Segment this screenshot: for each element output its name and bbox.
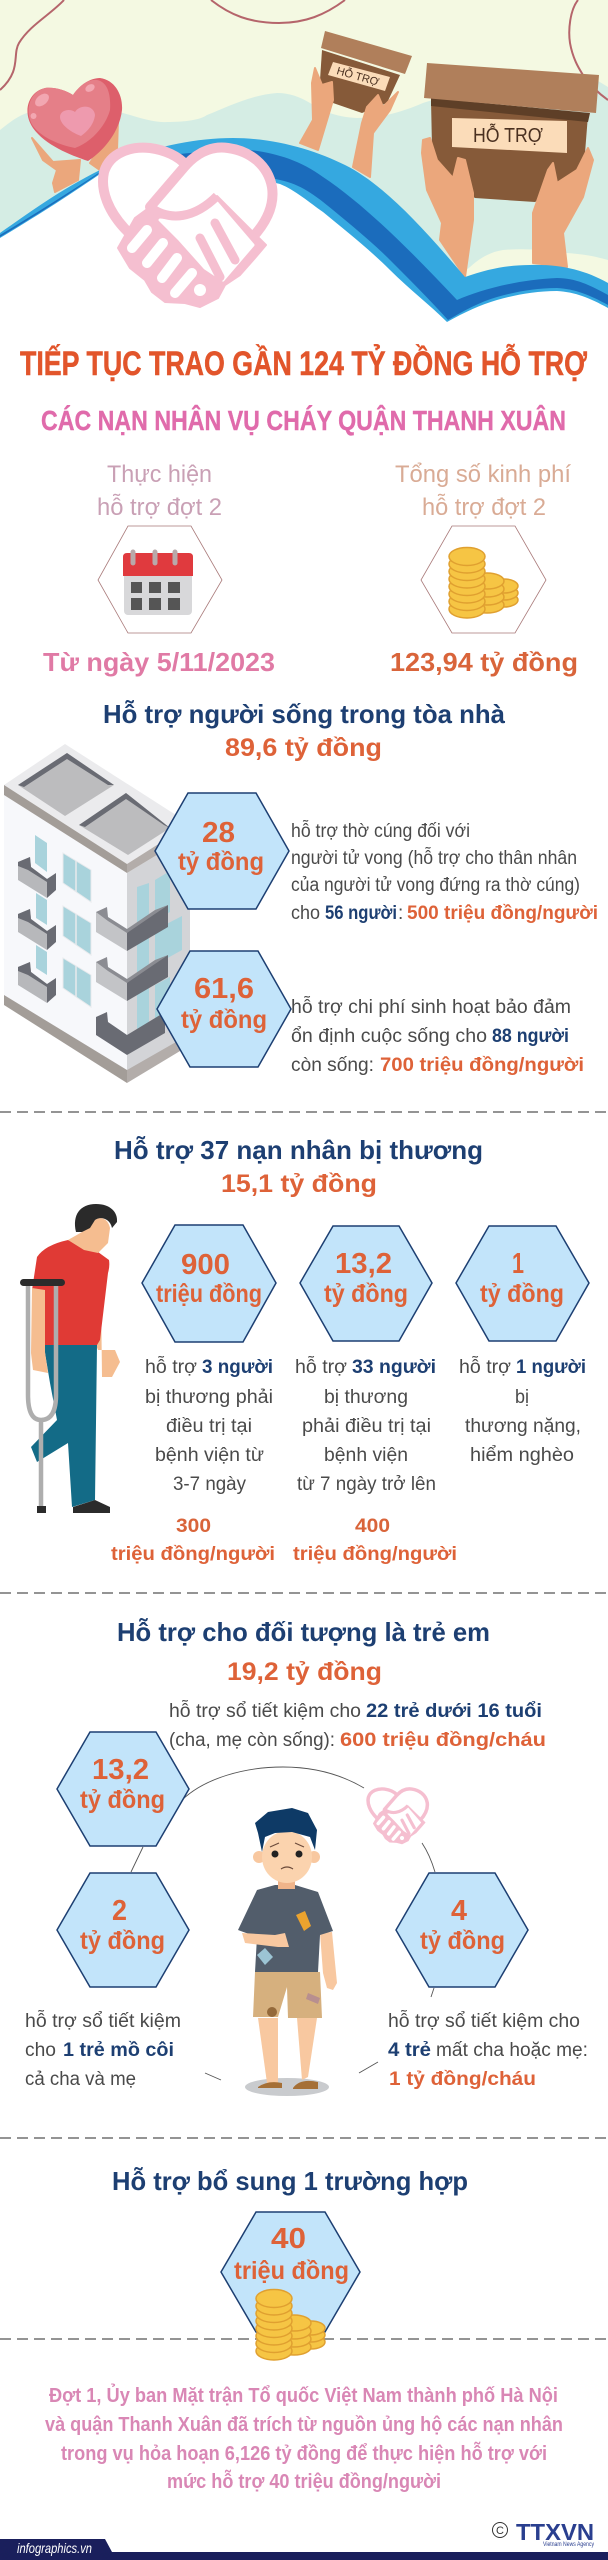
text: 1 orphan: hỗ trợ sổ tiết kiệm xyxy=(25,2010,181,2032)
text: worship support: của người tử vong đứng ra thờ cúng) xyxy=(291,875,580,896)
hexagon: 900 triệu đồng xyxy=(142,1225,276,1342)
illustration: sad child xyxy=(238,1808,337,2096)
hexagon: 2 tỷ đồng: tỷ đồng xyxy=(80,1927,165,1955)
text: 1 person: thương nặng, xyxy=(465,1416,581,1437)
note: first phase xyxy=(45,2383,563,2493)
text: 1 orphan xyxy=(25,2010,181,2090)
text: worship support: người tử vong (hỗ trợ cho thân nhân xyxy=(291,847,577,869)
text: 22 children xyxy=(169,1700,546,1751)
hexagon: 61,6 tỷ đồng xyxy=(157,951,291,1067)
heading: Hỗ trợ người sống trong tòa nhà xyxy=(103,699,506,729)
hexagon: 4 tỷ đồng: 4 xyxy=(451,1895,467,1927)
text: 4 children: hỗ trợ sổ tiết kiệm cho xyxy=(388,2010,580,2032)
panel: total funding: hỗ trợ đợt 2 xyxy=(422,494,546,521)
small box with hands xyxy=(300,31,412,177)
panel: total funding: Tổng số kinh phí xyxy=(395,461,571,488)
text: 3 people: bệnh viện từ xyxy=(155,1445,264,1466)
hexagon: 13,2 tỷ đồng: 13,2 xyxy=(92,1754,149,1786)
panel: implementation date: Từ ngày 5/11/2023 xyxy=(43,647,275,677)
note: first phase: và quận Thanh Xuân đã trích từ nguồn ủng hộ các nạn nhân xyxy=(45,2414,563,2436)
hexagon: 40 triệu đồng: 40 xyxy=(271,2223,306,2255)
hexagon: 61,6 tỷ đồng: 61,6 xyxy=(194,973,254,1005)
hexagon: 4 tỷ đồng: tỷ đồng xyxy=(420,1927,505,1955)
header illustration xyxy=(0,0,608,345)
footer bar xyxy=(0,2539,608,2560)
connecting arcs xyxy=(131,1767,435,2080)
heading: Hỗ trợ bổ sung 1 trường hợp xyxy=(112,2166,468,2196)
icon: heart xyxy=(27,78,122,161)
hexagon: 13,2 tỷ đồng: 13,2 xyxy=(335,1248,392,1280)
text: 1 person: bị xyxy=(515,1387,529,1408)
hexagon: 61,6 tỷ đồng: tỷ đồng xyxy=(181,1006,267,1034)
text: 3 people: hỗ trợ xyxy=(145,1356,197,1378)
text: worship support: : xyxy=(398,903,403,924)
text: 1 orphan: cho xyxy=(25,2040,56,2061)
hexagon outline xyxy=(98,526,222,633)
icon: small handshake heart xyxy=(368,1789,427,1844)
text: 4 children: 1 tỷ đồng/cháu xyxy=(389,2069,536,2090)
text: 33 people xyxy=(295,1356,436,1495)
text: 1 person: hiểm nghèo xyxy=(470,1445,574,1466)
illustration: man on crutches xyxy=(20,1204,120,1513)
text: 22 children: 600 triệu đồng/cháu xyxy=(340,1730,546,1751)
icon: calendar xyxy=(123,552,193,615)
text: 22 children: (cha, mẹ còn sống): xyxy=(169,1730,335,1751)
text: 3 people xyxy=(145,1356,273,1495)
text: 3 people: 3-7 ngày xyxy=(173,1474,246,1495)
heading: Hỗ trợ cho đối tượng là trẻ em xyxy=(117,1617,490,1647)
text: 33 people: bệnh viện xyxy=(324,1445,408,1466)
text: living cost support: hỗ trợ chi phí sinh hoạt bảo đảm xyxy=(291,996,571,1018)
section total: 89,6 tỷ đồng xyxy=(225,734,382,762)
amount: 300 per person xyxy=(111,1516,275,1565)
panel: total funding xyxy=(390,461,578,677)
panel: implementation date xyxy=(43,461,275,677)
cream background xyxy=(0,0,608,340)
hexagon: 28 tỷ đồng: tỷ đồng xyxy=(178,848,264,876)
text: worship support xyxy=(291,820,598,924)
big box with hands: HỖ TRỢ xyxy=(473,123,543,147)
text: 22 children: hỗ trợ sổ tiết kiệm cho xyxy=(169,1700,361,1722)
amount: 300 per person: 300 xyxy=(176,1516,211,1537)
note: first phase: Đợt 1, Ủy ban Mặt trận Tổ quốc Việt Nam thành phố Hà Nội xyxy=(49,2383,558,2407)
section: injured victims xyxy=(20,1135,589,1565)
hexagon: 900 triệu đồng: triệu đồng xyxy=(156,1280,262,1308)
text: 1 person: 1 người xyxy=(516,1357,586,1378)
big box with hands xyxy=(422,63,599,277)
panel: implementation date: hỗ trợ đợt 2 xyxy=(97,494,222,521)
text: 1 orphan: 1 trẻ mồ côi xyxy=(63,2040,174,2061)
section: residents of the building xyxy=(4,699,598,1083)
text: 33 people: phải điều trị tại xyxy=(302,1416,431,1437)
small box with hands: HỖ TRỢ xyxy=(335,64,381,89)
hand holding heart xyxy=(27,78,122,192)
amount: 400 per person xyxy=(293,1516,457,1565)
hexagon: 2 tỷ đồng xyxy=(57,1873,189,1987)
decorative curves xyxy=(0,0,608,100)
illustration: building xyxy=(4,744,190,1083)
text: living cost support: ổn định cuộc sống cho xyxy=(291,1026,487,1047)
note: first phase: trong vụ hỏa hoạn 6,126 tỷ đồng để thực hiện hỗ trợ với xyxy=(61,2441,547,2465)
hexagon: 13,2 tỷ đồng xyxy=(300,1226,432,1341)
hexagon: 40 triệu đồng xyxy=(221,2212,360,2332)
text: living cost support: 88 người xyxy=(492,1026,569,1047)
section total: 19,2 tỷ đồng xyxy=(227,1658,382,1686)
text: 1 orphan: cả cha và mẹ xyxy=(25,2069,136,2090)
hexagon: 13,2 tỷ đồng: tỷ đồng xyxy=(324,1280,408,1308)
text: worship support: 56 người xyxy=(325,903,397,924)
text: 4 children: 4 trẻ xyxy=(388,2040,431,2061)
amount: 400 per person: 400 xyxy=(355,1516,390,1537)
amount: 300 per person: triệu đồng/người xyxy=(111,1544,275,1565)
text: worship support: 500 triệu đồng/người xyxy=(407,903,598,924)
text: 33 people: bị thương xyxy=(324,1387,408,1408)
hexagon: 1 tỷ đồng: 1 xyxy=(512,1248,524,1280)
logo: TTXVN: Vietnam News Agency xyxy=(543,2542,594,2548)
heart face xyxy=(29,80,110,148)
text: living cost support xyxy=(291,996,584,1076)
text: worship support: hỗ trợ thờ cúng đối với xyxy=(291,820,470,842)
hexagon: 13,2 tỷ đồng: tỷ đồng xyxy=(80,1786,165,1814)
text: 3 people: bị thương phải xyxy=(145,1387,273,1408)
amount: 400 per person: triệu đồng/người xyxy=(293,1544,457,1565)
hexagon: 13,2 tỷ đồng xyxy=(57,1732,189,1846)
text: living cost support: còn sống: xyxy=(291,1055,374,1076)
hexagon outline xyxy=(421,526,546,633)
logo: TTXVN: C xyxy=(496,2525,504,2537)
hexagon: 1 tỷ đồng xyxy=(456,1226,589,1341)
logo: TTXVN xyxy=(492,2519,594,2548)
text: 22 children: 22 trẻ dưới 16 tuổi xyxy=(366,1701,542,1722)
text: living cost support: 700 triệu đồng/người xyxy=(380,1055,584,1076)
text: 1 person: hỗ trợ xyxy=(459,1356,511,1378)
section: children xyxy=(25,1617,588,2096)
text: 4 children: mất cha hoặc mẹ: xyxy=(436,2040,588,2061)
text: 33 people: hỗ trợ xyxy=(295,1356,347,1378)
note: first phase: mức hỗ trợ 40 triệu đồng/người xyxy=(167,2469,441,2493)
hexagon: 40 triệu đồng: triệu đồng xyxy=(234,2257,349,2285)
icon: coins xyxy=(449,548,518,618)
text: 3 people: 3 người xyxy=(202,1357,273,1378)
inner heart xyxy=(60,107,95,136)
section total: 15,1 tỷ đồng xyxy=(221,1170,377,1198)
icon: handshake heart xyxy=(103,148,273,307)
logo: TTXVN: TTXVN xyxy=(516,2519,594,2545)
panel: implementation date: Thực hiện xyxy=(107,461,212,488)
hexagon: 28 tỷ đồng xyxy=(155,793,289,909)
text: 33 people: 33 người xyxy=(352,1357,436,1378)
text: 33 people: từ 7 ngày trở lên xyxy=(297,1474,436,1495)
text: worship support: cho xyxy=(291,903,320,924)
icon: coins xyxy=(256,2290,325,2360)
text: 4 children xyxy=(388,2010,588,2090)
hexagon: 2 tỷ đồng: 2 xyxy=(112,1895,127,1927)
panel: total funding: 123,94 tỷ đồng xyxy=(390,647,578,677)
text: 1 person xyxy=(459,1356,586,1466)
blue wave xyxy=(0,138,608,345)
hexagon: 28 tỷ đồng: 28 xyxy=(202,817,235,849)
hexagon: 4 tỷ đồng xyxy=(396,1873,528,1987)
section: additional case xyxy=(0,2166,608,2360)
hexagon: 1 tỷ đồng: tỷ đồng xyxy=(480,1280,564,1308)
hexagon: 900 triệu đồng: 900 xyxy=(181,1249,230,1281)
teal hills xyxy=(0,75,608,290)
text: 3 people: điều trị tại xyxy=(166,1416,252,1437)
heading: Hỗ trợ 37 nạn nhân bị thương xyxy=(114,1135,483,1165)
footer bar: infographics.vn xyxy=(17,2540,92,2556)
